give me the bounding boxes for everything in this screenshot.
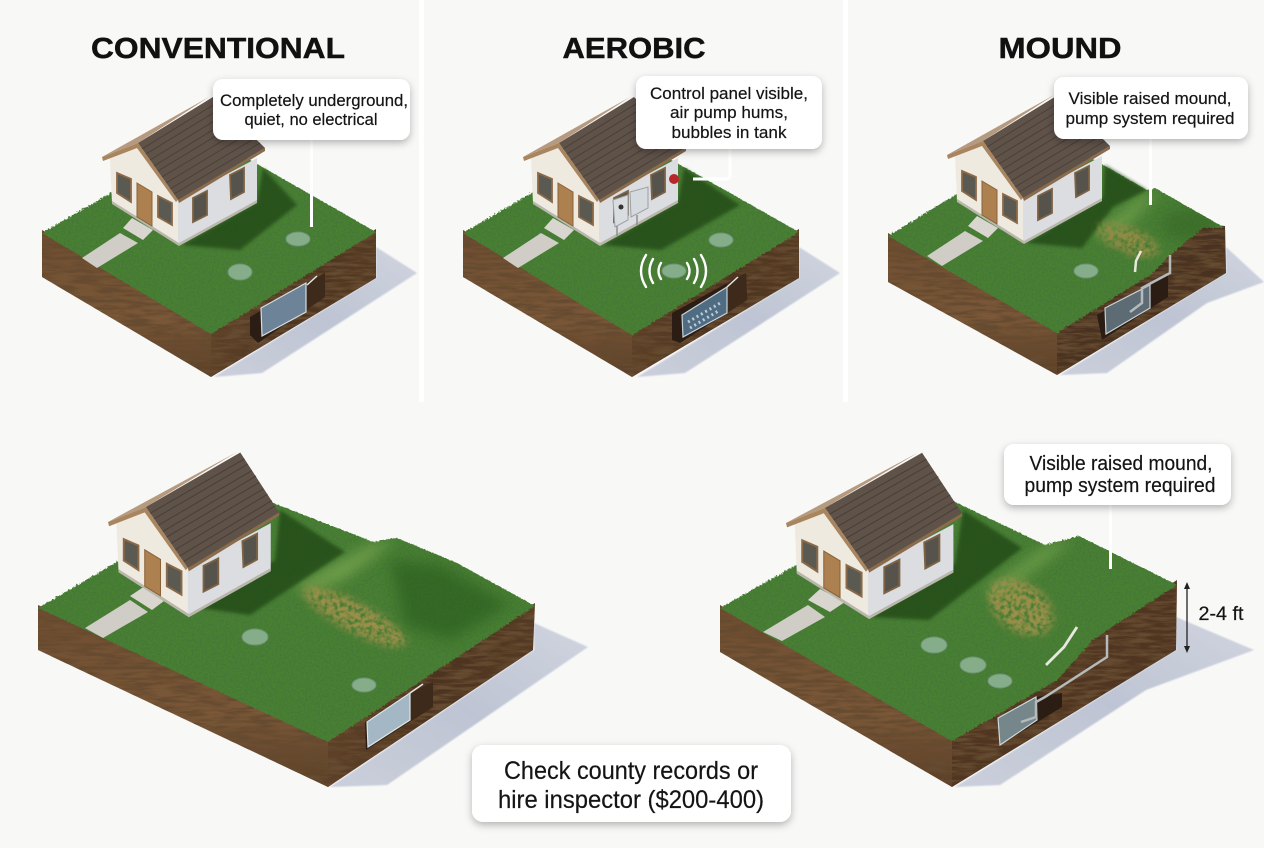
callout: mound: pump system required — [1066, 109, 1234, 128]
house shadow on lawn — [871, 510, 1022, 620]
septic lids — [921, 637, 1012, 688]
ground shadow — [955, 617, 1254, 787]
septic lid — [1074, 264, 1098, 278]
buried tank and pipe — [1097, 255, 1170, 340]
callout: mound: Visible raised mound, — [1030, 453, 1212, 475]
mound shading — [1098, 192, 1218, 241]
callout connector — [693, 148, 730, 179]
scene: large mound, lower left — [38, 452, 588, 787]
soil block — [42, 229, 376, 377]
house shadow on lawn — [1027, 165, 1147, 248]
ground shadow — [214, 247, 417, 377]
house — [786, 453, 962, 619]
callout: conventional — [213, 79, 410, 140]
soil block — [463, 229, 799, 377]
mound shading — [293, 540, 510, 640]
callout connector — [1149, 138, 1152, 205]
septic lids — [662, 233, 733, 278]
callout: mound — [1004, 444, 1231, 505]
lawn — [463, 136, 799, 335]
control panels and alarm — [613, 174, 679, 236]
buried aerobic tank — [672, 273, 747, 343]
lawn and mound surface — [888, 136, 1225, 333]
sound waves — [641, 255, 706, 287]
callout connector — [310, 139, 313, 227]
soil block — [720, 580, 1177, 787]
panel: aerobic — [463, 33, 840, 377]
dry patch — [978, 567, 1064, 647]
callout: check records — [472, 745, 791, 822]
ground shadow — [330, 623, 588, 787]
heading: conventional: CONVENTIONAL — [91, 33, 345, 65]
house — [947, 95, 1110, 244]
walkway and steps — [763, 589, 845, 641]
panel: mound — [888, 33, 1264, 375]
ground shadow — [1060, 247, 1264, 375]
lawn and mound surface — [720, 490, 1177, 741]
callout: mound — [1054, 77, 1248, 139]
callout: aerobic: bubbles in tank — [672, 123, 787, 142]
soil block — [888, 224, 1226, 375]
house — [108, 452, 279, 617]
scene: mound with callout, lower right — [720, 444, 1254, 787]
callout: mound: pump system required — [1024, 475, 1216, 497]
house shadow on lawn — [182, 168, 297, 250]
lawn and mound surface — [38, 490, 535, 742]
walkway and steps — [503, 218, 574, 268]
vent pipe — [1135, 251, 1141, 272]
walkway and steps — [85, 586, 168, 638]
walkway and steps — [82, 218, 153, 268]
house shadow on lawn — [200, 510, 345, 615]
callout: check records: hire inspector ($200-400) — [498, 786, 764, 814]
vent pipe — [1046, 627, 1077, 665]
ground shadow — [637, 247, 840, 377]
mound shading — [988, 538, 1070, 594]
panel dividers — [419, 0, 848, 402]
height arrow — [1184, 582, 1190, 653]
septic lids — [228, 232, 310, 280]
callout connector — [1109, 504, 1112, 569]
house — [523, 97, 686, 246]
heading: aerobic: AEROBIC — [562, 33, 706, 65]
buried tank and pipe — [998, 635, 1107, 745]
panel: conventional — [42, 33, 417, 377]
buried tank — [365, 682, 433, 750]
callout: aerobic: air pump hums, — [670, 103, 788, 122]
septic lids — [242, 629, 376, 692]
height label: 2-4 ft — [1198, 604, 1244, 625]
dry patch — [1093, 216, 1163, 264]
callout: aerobic — [636, 76, 822, 149]
soil block — [38, 603, 535, 787]
dry patch — [297, 577, 413, 657]
callout: aerobic: Control panel visible, — [650, 84, 808, 103]
lawn — [42, 136, 376, 334]
callout: mound: Visible raised mound, — [1068, 89, 1232, 108]
house shadow on lawn — [603, 168, 740, 250]
callout: conventional: quiet, no electrical — [244, 110, 378, 129]
heading: mound: MOUND — [998, 33, 1122, 65]
house — [102, 97, 265, 246]
callout: conventional: Completely underground, — [220, 91, 408, 110]
buried tank — [250, 273, 325, 343]
walkway and steps — [927, 216, 998, 266]
callout: check records: Check county records or — [504, 757, 758, 785]
